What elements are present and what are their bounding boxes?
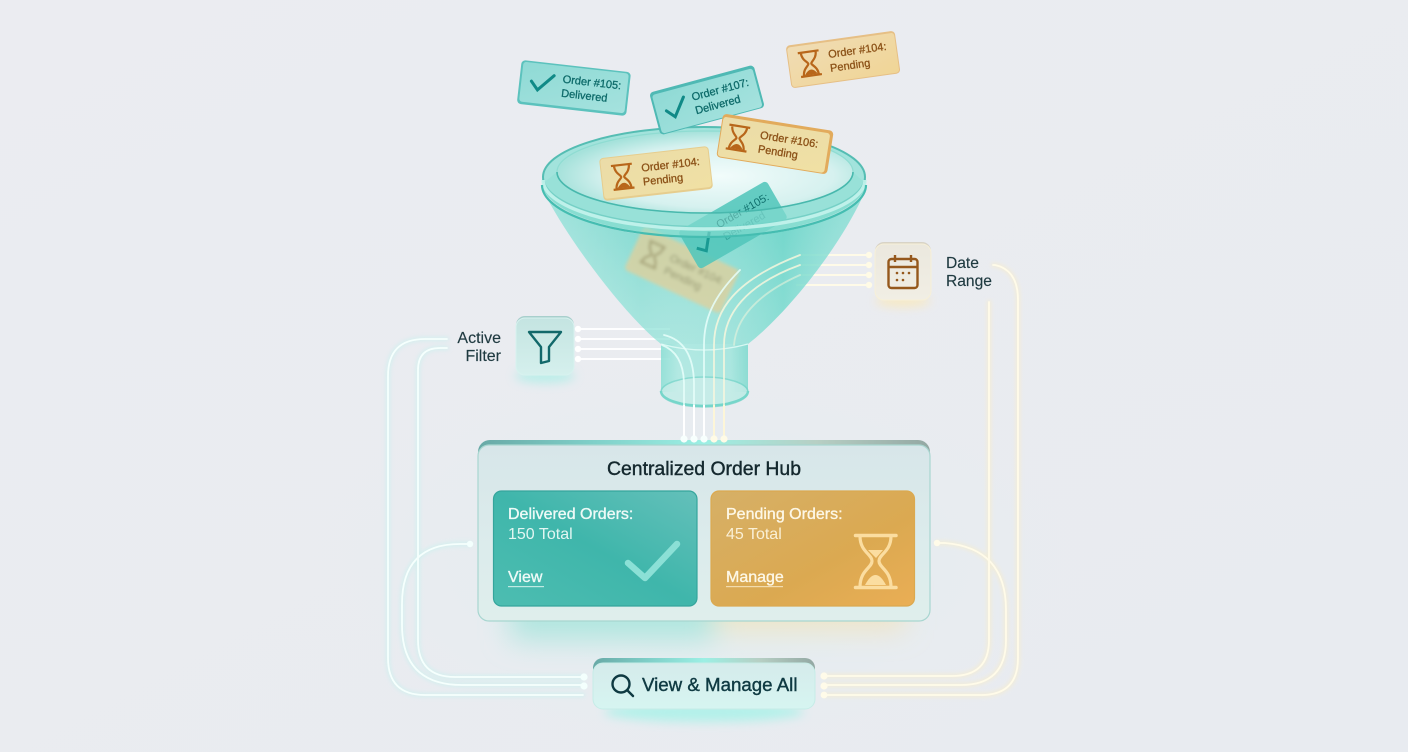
blurred card inside funnel: Order #104: Pending: [662, 265, 703, 293]
card: pending orders: Pending Orders:: [726, 506, 843, 523]
blurred card inside funnel: Order #104: Order #104:: [667, 252, 726, 288]
hub input dots: [680, 405, 728, 443]
top card: Order #105 Delivered: Delivered: [560, 88, 608, 105]
filter input wires: [575, 326, 670, 362]
funnel neck: [661, 344, 748, 407]
top card: Order #104 Pending (in funnel): [599, 146, 713, 201]
tile: calendar: [875, 242, 931, 307]
connector wires: left side: [388, 339, 588, 695]
icon: calendar: [888, 255, 918, 288]
card: delivered orders: 150 Total: [508, 526, 573, 543]
funnel cone: [547, 198, 862, 406]
top card: Order #104 Pending (upper right): [786, 31, 901, 88]
icon: hourglass: [726, 125, 750, 152]
card: delivered orders: View: [508, 569, 543, 586]
date range control: [875, 242, 992, 307]
icon: hourglass: [798, 50, 822, 77]
top card: Order #107 Delivered: Order #107:: [690, 77, 750, 104]
top card: Order #104 Pending (upper right): Pending: [829, 57, 871, 75]
funnel lip front: [542, 172, 866, 237]
top card: Order #104 Pending (in funnel): Order #104:: [641, 156, 700, 175]
active filter control: [457, 316, 575, 383]
label: Active Filter: Active: [457, 330, 501, 347]
funnel cone highlight: [547, 198, 862, 406]
top card: Order #107 Delivered: Delivered: [694, 94, 742, 117]
button: View & Manage All: [593, 658, 815, 722]
wires through funnel to hub: [662, 255, 800, 436]
top card: Order #104 Pending (upper right): Order #104:: [827, 41, 887, 61]
icon: large hourglass: [856, 536, 896, 588]
icon: filter funnel: [529, 332, 561, 363]
hub glow: [510, 590, 905, 640]
icon: magnifier: [612, 676, 633, 696]
connector wires: right side: [820, 265, 1018, 698]
date input wires: [796, 252, 872, 288]
card: pending orders: Manage: [726, 569, 784, 586]
funnel back: rim and bowl: [542, 127, 866, 236]
top card: Order #106 Pending: Pending: [757, 143, 799, 162]
blurred card inside funnel: Order #104: [624, 226, 740, 314]
card sinking into funnel: Order #105: [678, 180, 788, 270]
button: View & Manage All: View & Manage All: [642, 674, 797, 695]
top card: Order #106 Pending: [716, 114, 834, 174]
top card: Order #105 Delivered: [517, 60, 631, 116]
tile: filter: [515, 316, 575, 383]
label: Active Filter: Filter: [465, 348, 502, 365]
card sinking into funnel: Order #105: Delivered: [721, 210, 768, 243]
top card: Order #105 Delivered: Order #105:: [562, 74, 622, 92]
card: delivered orders: Delivered Orders:: [508, 506, 633, 523]
top card: Order #106 Pending: Order #106:: [759, 130, 819, 151]
top card: Order #104 Pending (in funnel): Pending: [642, 172, 684, 188]
label: Date Range: Date: [946, 255, 979, 272]
card: pending orders: 45 Total: [726, 526, 782, 543]
card: delivered orders: [494, 491, 697, 606]
top card: Order #107 Delivered: [649, 65, 765, 135]
label: Date Range: Range: [946, 273, 992, 290]
panel: Centralized Order Hub: [478, 440, 930, 621]
card: pending orders: [711, 491, 914, 606]
heading: Centralized Order Hub: [607, 458, 801, 480]
card sinking into funnel: Order #105: Order #105:: [714, 191, 771, 231]
icon: check: [628, 544, 677, 578]
icon: hourglass: [611, 164, 635, 190]
